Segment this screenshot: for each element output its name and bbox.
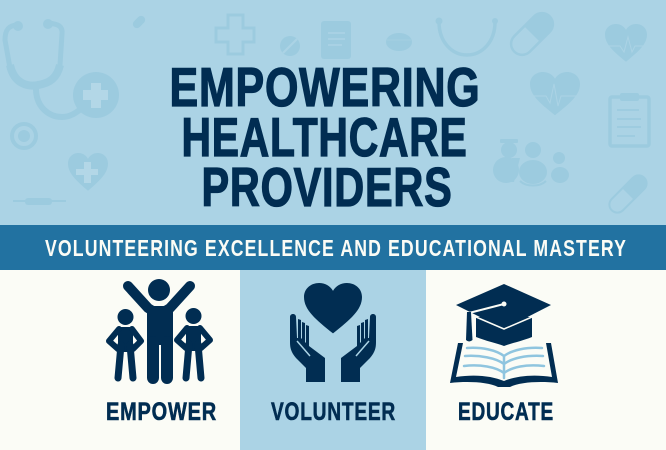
header panel background [0, 0, 666, 225]
icon: clipboard [610, 93, 649, 146]
label: educate: EDUCATE [458, 398, 554, 426]
title: PROVIDERS [202, 156, 452, 218]
icon: three people [109, 279, 210, 384]
icon: disk [386, 33, 412, 51]
title: EMPOWERING [170, 56, 480, 118]
icon: round tablet [280, 36, 300, 56]
icon: group of people [493, 139, 569, 186]
icon: heart with pulse top [605, 24, 647, 62]
icon: document [321, 21, 351, 59]
icon: syringe [13, 198, 66, 205]
label: volunteer: VOLUNTEER [271, 398, 396, 426]
panel: volunteer [240, 270, 426, 450]
title: HEALTHCARE [182, 106, 468, 168]
icon: cross outline [216, 15, 254, 54]
icon: heart in hands [290, 283, 376, 382]
icon: graduation cap and book [450, 284, 558, 387]
icon: capsule lower [606, 172, 650, 216]
icon: small tablet [131, 14, 147, 30]
background medical icons [5, 9, 650, 216]
icon: stethoscope arc [436, 18, 498, 55]
icon: heart with pulse middle [530, 72, 580, 115]
icon: capsule [507, 9, 557, 59]
label: empower: EMPOWER [106, 398, 217, 426]
subtitle band [0, 225, 666, 270]
icon: heart with cross [68, 153, 108, 191]
icon: target ring [12, 124, 36, 148]
icon: stethoscope [5, 19, 119, 118]
panel: empower [0, 270, 240, 450]
panel: educate [426, 270, 666, 450]
title [170, 56, 480, 218]
